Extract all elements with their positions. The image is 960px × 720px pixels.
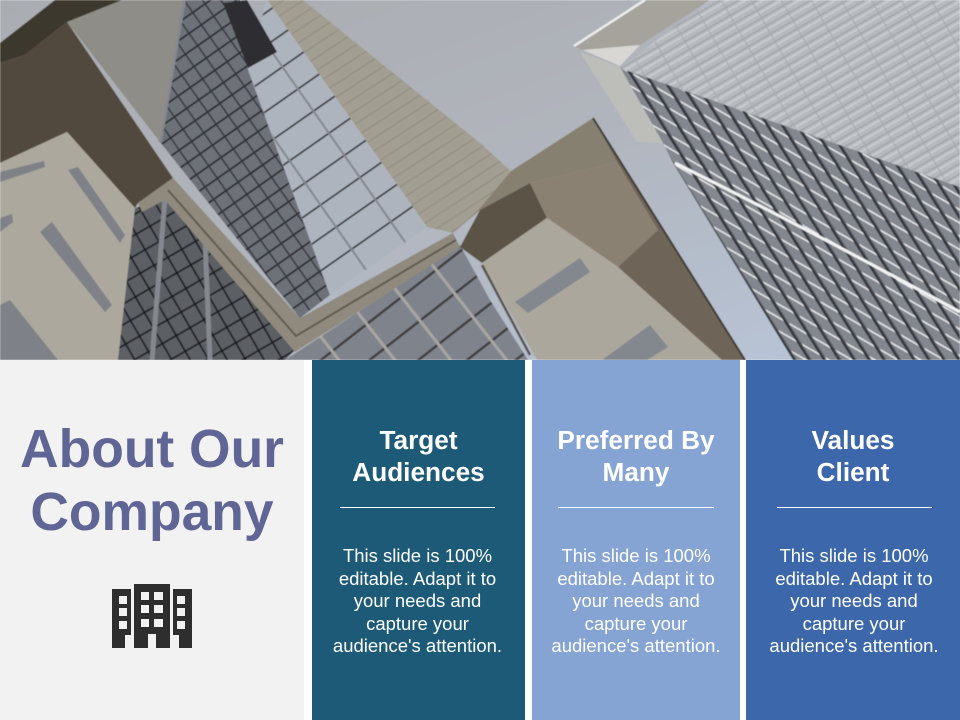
panel text: editable. Adapt it to [557,568,715,588]
panel divider [777,507,932,508]
top façade [620,0,960,187]
panel heading: Target [379,425,458,455]
panel text: capture your [803,612,905,634]
panel heading: Many [603,457,669,487]
panel text: audience's attention. [333,635,502,656]
panel heading [557,425,715,487]
panel heading [812,425,894,487]
panel: values client [746,360,960,720]
left concrete block [0,132,135,360]
panel text: This slide is 100% [343,545,492,566]
panel text: editable. Adapt it to [775,568,933,588]
white reflection streak [675,163,960,312]
panel text [333,545,502,656]
corner top [583,45,640,66]
lower right glass [285,245,528,360]
panel text: your needs and [354,590,481,611]
soffit shadow [460,183,547,263]
photo: skyscrapers seen from below [0,0,960,360]
corner roof shadow [575,0,710,50]
icon: office buildings [112,584,192,648]
dark recess [223,0,277,68]
panel text [551,545,721,656]
upper glass, dark grid [160,0,330,318]
overhang dark edge [593,118,745,360]
concrete mullion [482,265,530,355]
panel text: audience's attention. [769,635,939,656]
panel heading: Preferred By [557,425,715,455]
panel divider [558,507,714,508]
panel text: This slide is 100% [779,545,929,566]
glass columns [152,198,210,360]
lower right concrete [482,218,722,360]
panel text: capture your [366,612,469,634]
tower concrete side [267,0,511,233]
upper concrete panel [67,0,183,142]
panel text: your needs and [572,590,700,611]
sky [0,0,960,360]
panel divider [340,507,495,508]
panel heading [352,425,485,487]
lower left glass [118,198,295,360]
panel text: audience's attention. [551,635,721,656]
panel text [769,545,939,656]
brown soffit [0,22,173,208]
heading: About Our [20,420,284,479]
panel text: This slide is 100% [561,545,711,566]
lower façade [620,68,960,360]
panel text: your needs and [790,590,918,611]
corner white edge [574,0,645,46]
panel text: editable. Adapt it to [339,568,496,588]
right tower [574,0,960,360]
panel heading: Client [817,457,889,487]
heading [20,420,284,542]
corner side face [580,52,663,143]
roof edge [0,0,122,63]
glass column [160,0,184,142]
panel: target audiences [312,360,525,720]
panel: preferred by many [532,360,740,720]
soffit lower [593,118,745,360]
concrete inset panels [515,258,668,360]
soffit middle [530,162,658,267]
left tower [0,0,745,360]
ledge shadow [168,190,456,336]
diagonal concrete ledge [138,178,460,352]
overhang top face [453,118,617,233]
left block inset panels [0,161,125,360]
panel text: capture your [585,612,687,634]
panel heading: Audiences [352,457,485,487]
upper glass, light panes [248,0,427,295]
heading: Company [30,483,274,542]
panel: about our company [0,360,304,720]
panel heading: Values [812,425,894,455]
